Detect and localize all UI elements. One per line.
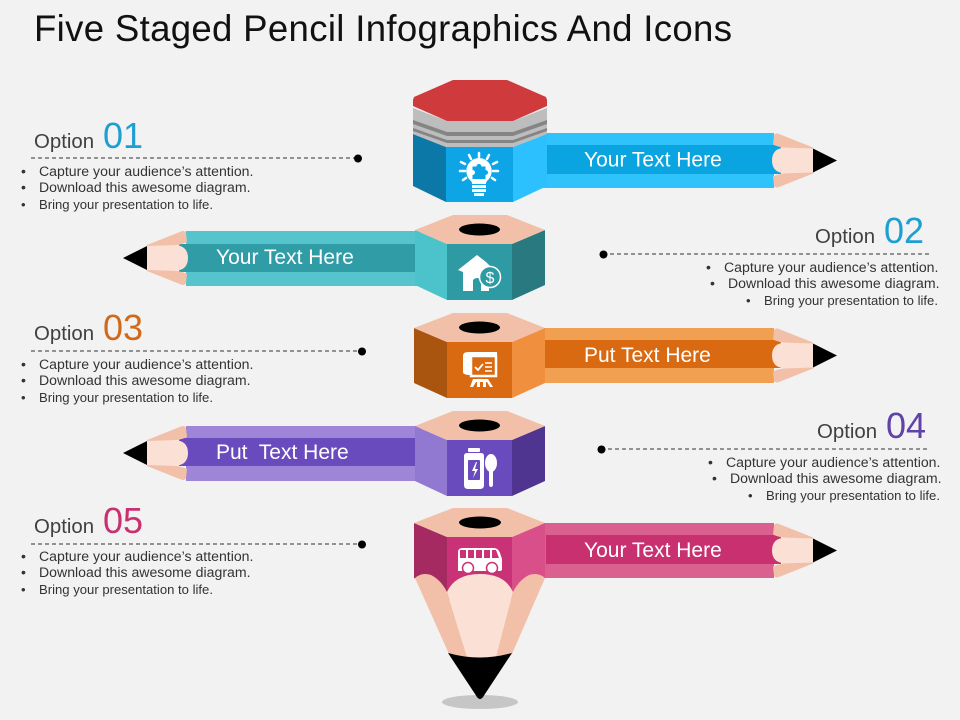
icon: bus <box>458 548 502 574</box>
pencil 5: shadow under tip <box>442 695 518 709</box>
option 04 text block: • <box>708 454 713 470</box>
option 03 text block: Option <box>34 323 94 345</box>
option 04 text block: 04 <box>886 405 926 446</box>
option 04 text block <box>598 405 942 503</box>
option 01 text block: 01 <box>103 115 143 156</box>
option 05 text block: Capture your audience’s attention. <box>39 548 253 564</box>
icon: bottle and spoon <box>464 448 497 489</box>
icon: house and dollar: $ <box>486 270 495 287</box>
pencil 2: horizontal teal bar <box>123 231 421 286</box>
option 03 text block: Download this awesome diagram. <box>39 372 251 388</box>
option 01 text block: Option <box>34 131 94 153</box>
option 02 text block: • <box>746 293 751 308</box>
option 04 text block: Download this awesome diagram. <box>730 470 942 486</box>
icon: presentation board <box>463 352 497 387</box>
option 03 text block: • <box>21 356 26 372</box>
option 05 text block: Download this awesome diagram. <box>39 564 251 580</box>
option 02 text block: Capture your audience’s attention. <box>724 259 938 275</box>
option 01 text block: • <box>21 179 26 195</box>
option 05 text block: 05 <box>103 500 143 541</box>
option 05 text block: • <box>21 564 26 580</box>
option 05 text block: • <box>21 548 26 564</box>
option 04 text block: • <box>748 488 753 503</box>
pencil 3: hexagon body <box>414 313 545 398</box>
option 03 text block <box>21 307 366 405</box>
option 04 text block: Capture your audience’s attention. <box>726 454 940 470</box>
option 02 text block: • <box>710 275 715 291</box>
pencil 4: hexagon body <box>415 411 545 496</box>
option 04 text block: • <box>712 470 717 486</box>
option 01 text block: • <box>21 197 26 212</box>
option 05 text block <box>21 500 366 597</box>
option 03 text block: Bring your presentation to life. <box>39 390 213 405</box>
option 02 text block: Bring your presentation to life. <box>764 293 938 308</box>
option 01 text block: • <box>21 163 26 179</box>
pencil 4: horizontal purple bar <box>123 426 421 481</box>
option 05 text block: • <box>21 582 26 597</box>
pencil 3: horizontal orange bar <box>540 328 837 383</box>
pencil 1: horizontal blue bar <box>540 133 837 188</box>
option 03 text block: Capture your audience’s attention. <box>39 356 253 372</box>
pencil 5: horizontal pink bar: Your Text Here <box>584 539 722 562</box>
pencil 2: horizontal teal bar: Your Text Here <box>216 246 354 269</box>
pencil 2: hexagon body <box>415 215 545 300</box>
option 01 text block: Bring your presentation to life. <box>39 197 213 212</box>
option 02 text block: 02 <box>884 210 924 251</box>
option 01 text block: Capture your audience’s attention. <box>39 163 253 179</box>
option 03 text block: • <box>21 390 26 405</box>
title: Five Staged Pencil Infographics And Icons <box>34 8 732 49</box>
option 01 text block <box>21 115 362 212</box>
option 04 text block: Bring your presentation to life. <box>766 488 940 503</box>
option 05 text block: Bring your presentation to life. <box>39 582 213 597</box>
option 03 text block: 03 <box>103 307 143 348</box>
pencil 5: main vertical pencil with tip <box>414 508 545 699</box>
pencil 4: horizontal purple bar: Put Text Here <box>216 441 349 464</box>
option 03 text block: • <box>21 372 26 388</box>
option 02 text block: Option <box>815 226 875 248</box>
option 02 text block: • <box>706 259 711 275</box>
option 04 text block: Option <box>817 421 877 443</box>
pencil 5: horizontal pink bar <box>540 523 837 578</box>
pencil 1: eraser hexagon body <box>413 80 547 202</box>
option 02 text block: Download this awesome diagram. <box>728 275 940 291</box>
option 05 text block: Option <box>34 516 94 538</box>
pencil 3: horizontal orange bar: Put Text Here <box>584 344 711 367</box>
option 01 text block: Download this awesome diagram. <box>39 179 251 195</box>
icon: house and dollar <box>458 255 500 291</box>
option 02 text block <box>600 210 940 308</box>
icon: light bulb <box>460 153 498 196</box>
pencil 1: horizontal blue bar: Your Text Here <box>584 148 722 172</box>
